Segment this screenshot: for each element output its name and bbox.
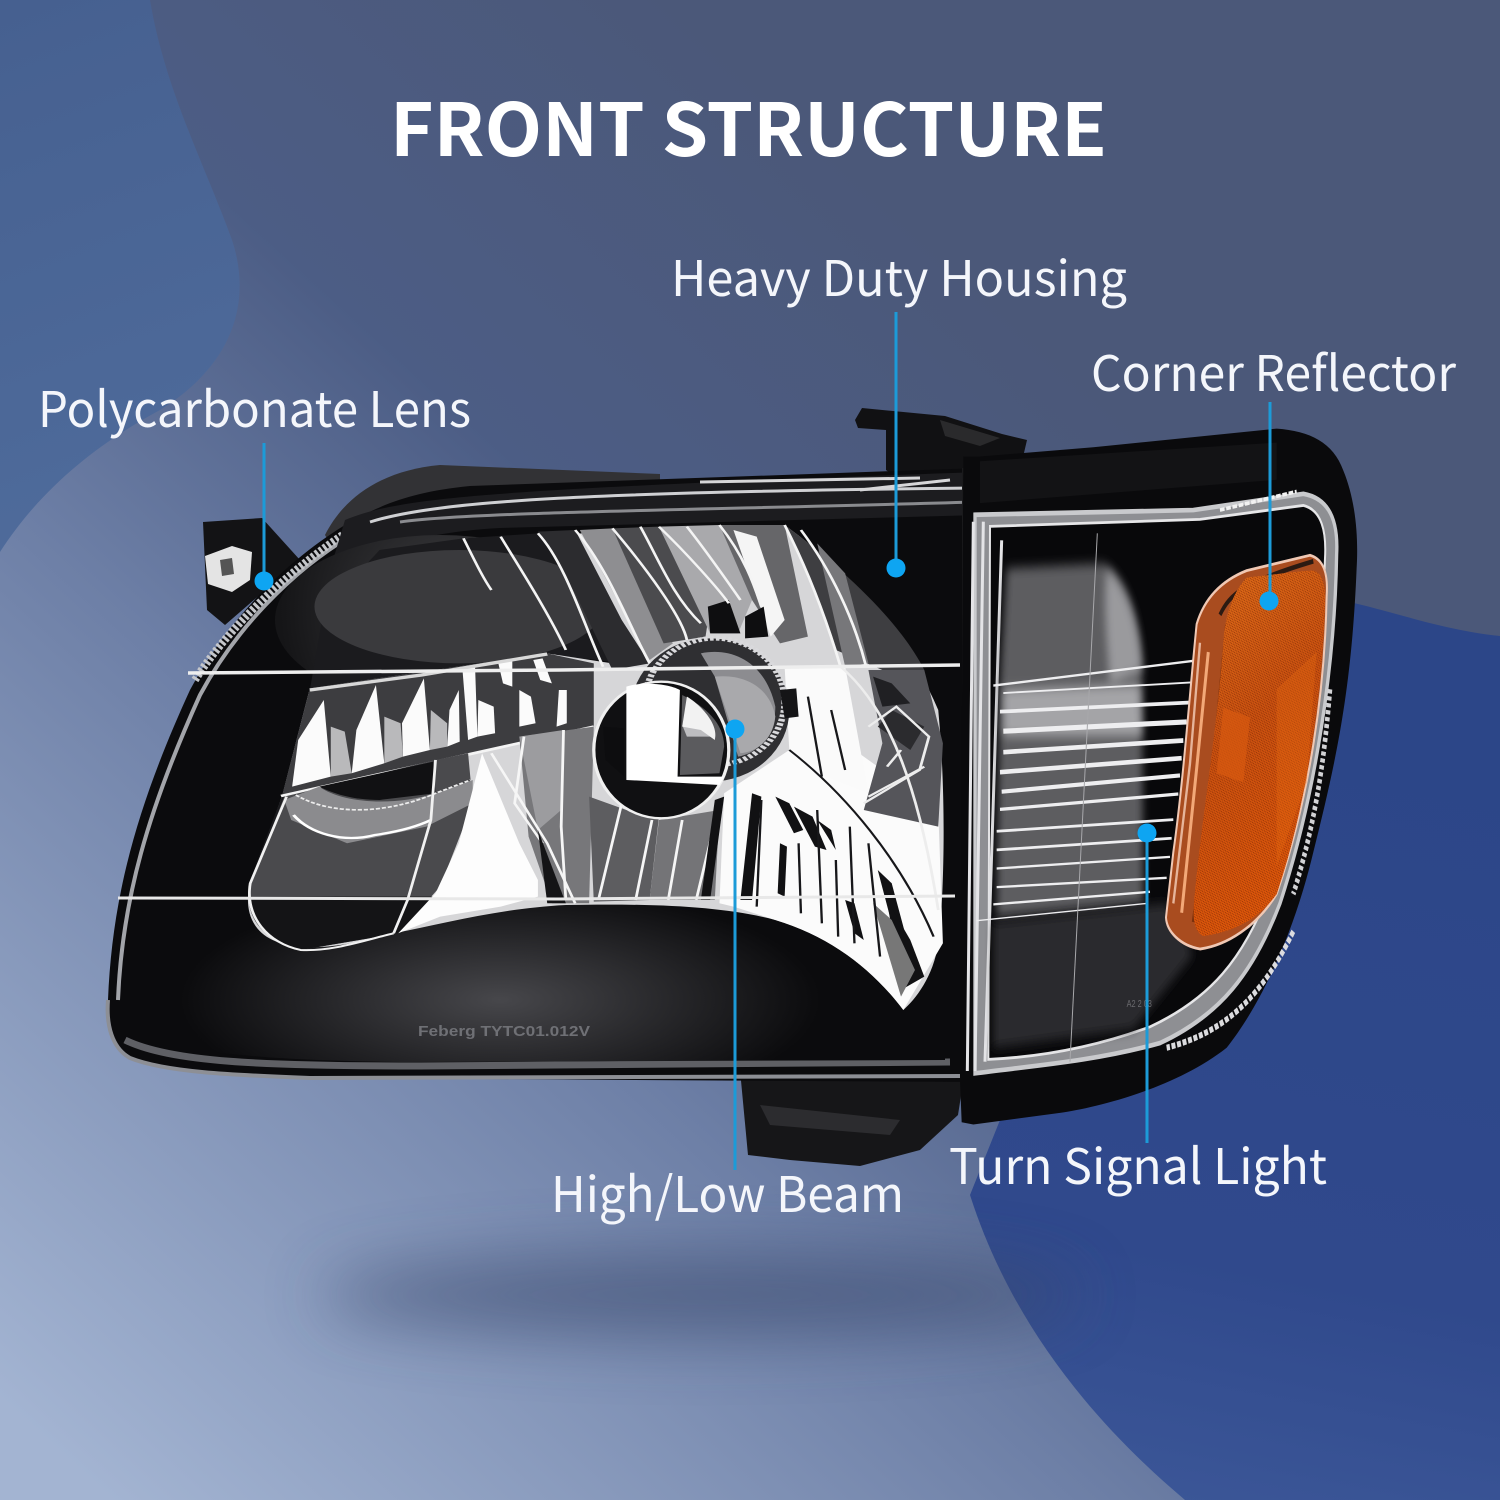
lamp divider post <box>962 468 984 1090</box>
top mounting clip <box>855 408 1027 480</box>
callout: High/Low Beam: High/Low Beam <box>551 1156 904 1227</box>
callout: Turn Signal Light <box>949 824 1327 1199</box>
callout: Polycarbonate Lens <box>38 371 471 590</box>
chrome reflector <box>248 525 944 1010</box>
upper ribs <box>538 530 650 670</box>
ground shadow <box>320 1255 1080 1335</box>
corner lamp <box>960 429 1357 1125</box>
horizontal lens lines <box>118 665 960 899</box>
bottom mounting bracket <box>740 1070 965 1166</box>
headlight assembly <box>108 408 1357 1166</box>
callout: High/Low Beam <box>551 720 904 1227</box>
bulb ring <box>631 638 789 782</box>
lower right bright ribs <box>719 740 943 1010</box>
reflector base <box>248 525 944 1010</box>
embossed lens mark: Feberg TYTC01.012V <box>418 1023 590 1040</box>
left mounting bracket <box>203 518 300 625</box>
main lamp lens <box>108 468 980 1082</box>
title: FRONT STRUCTURE <box>390 72 1107 178</box>
bulb <box>594 682 729 818</box>
interior glow <box>997 564 1143 917</box>
fin strip <box>282 653 594 797</box>
glass rim <box>975 494 1337 1073</box>
callout: Corner Reflector <box>1091 335 1457 610</box>
callout: Heavy Duty Housing <box>671 240 1127 578</box>
right lattice area <box>864 670 943 827</box>
lower dark chamber <box>128 905 950 1062</box>
callout: Corner Reflector: Corner Reflector <box>1091 335 1457 406</box>
callout: Polycarbonate Lens: Polycarbonate Lens <box>38 371 471 442</box>
amber reflector surround <box>1166 555 1327 949</box>
rear housing dome <box>325 465 660 560</box>
amber reflector lens <box>1194 571 1325 936</box>
white centre wedge <box>398 753 538 933</box>
callout: Turn Signal Light: Turn Signal Light <box>949 1128 1327 1199</box>
callout: Heavy Duty Housing: Heavy Duty Housing <box>671 240 1127 311</box>
upper reflector dark area <box>254 533 622 870</box>
curved lower left reflector <box>249 753 473 950</box>
black outer bezel <box>960 429 1357 1125</box>
lens slats <box>977 533 1197 1062</box>
embossed corner mark: A2 2 03 <box>1127 998 1152 1010</box>
upper dark chamber <box>275 535 605 705</box>
inner vertical rim lines <box>967 522 1002 1071</box>
